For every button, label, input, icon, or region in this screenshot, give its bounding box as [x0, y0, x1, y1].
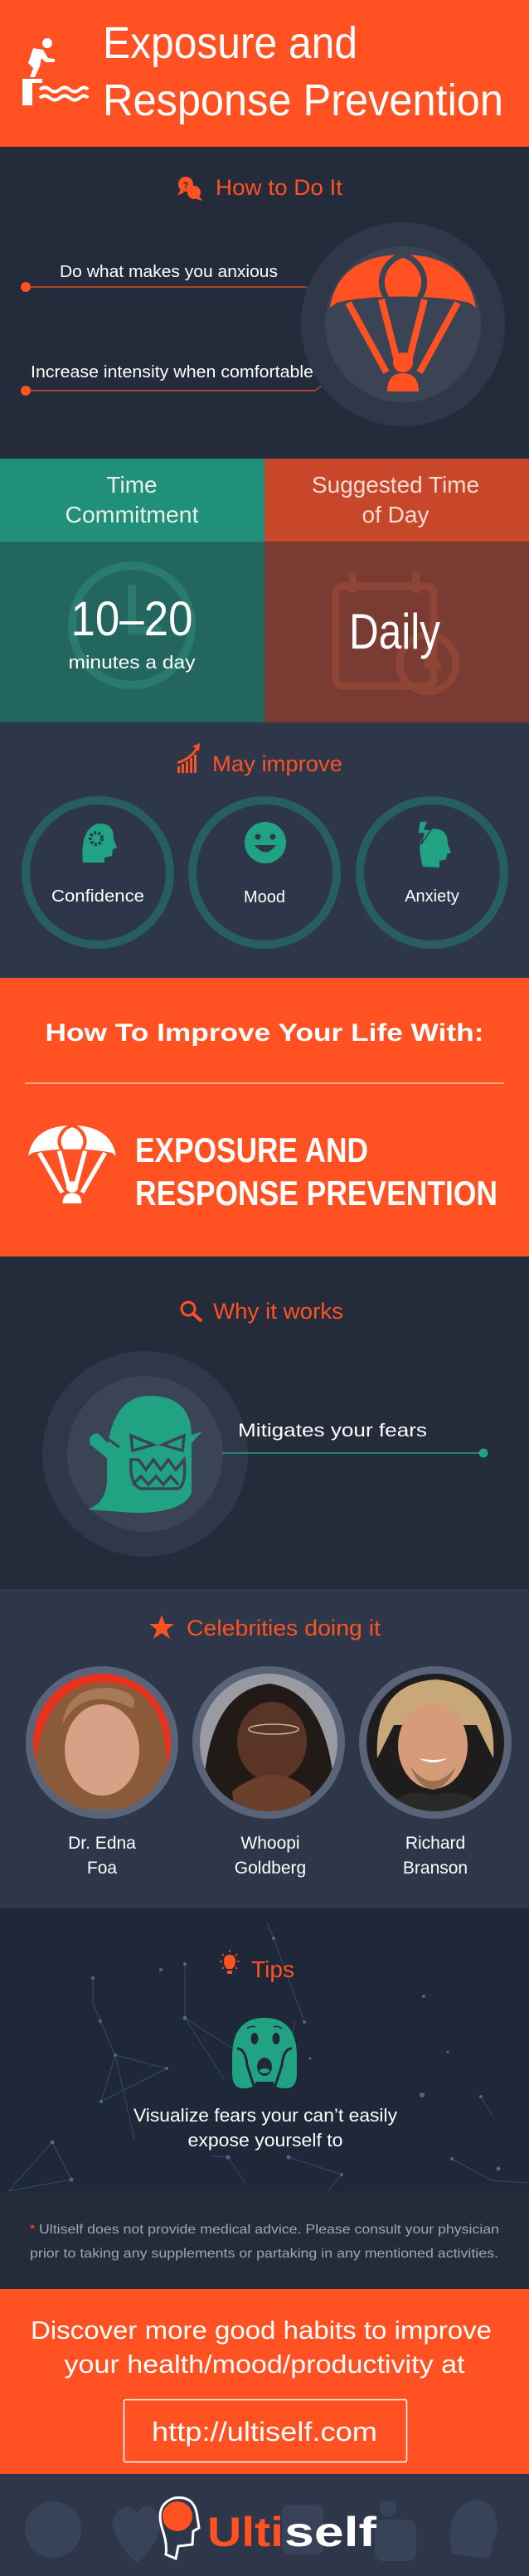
icon: clock watermark [72, 566, 192, 685]
names: Goldberg [235, 1859, 306, 1878]
logo: ultiself [160, 2497, 376, 2559]
names: Richard [405, 1834, 465, 1853]
names: Foa [87, 1859, 117, 1878]
benefit: mood [192, 800, 337, 945]
call to action [0, 2289, 529, 2474]
text: tip: expose yourself to [187, 2130, 343, 2151]
logo: ultiself: Ulti [207, 2509, 284, 2555]
disclaimer [0, 2191, 529, 2289]
icon: ghost in circle [42, 1351, 248, 1557]
photo: whoopi goldberg [191, 1666, 348, 1825]
heading: how to do it: How to Do It [216, 175, 343, 200]
text: 10-20 minutes: 10–20 [71, 592, 192, 646]
heading: suggested time of day: of Day [362, 502, 429, 527]
heading: suggested time of day [312, 472, 479, 527]
benefit: confidence [26, 800, 170, 945]
heading: time commitment [65, 472, 199, 527]
panel: why it works [0, 1256, 529, 1589]
disclaimer: Ultiself does not provide medical advice. Please consult your physician [39, 2223, 499, 2237]
benefit: mood: Mood [244, 888, 285, 906]
names: Dr. Edna [68, 1834, 136, 1853]
heading: tips: Tips [251, 1956, 294, 1982]
photo: richard branson [357, 1666, 514, 1825]
benefit: anxiety: Anxiety [405, 887, 459, 906]
icon: scared face [232, 2018, 297, 2088]
text: tip: Visualize fears your can’t easily [133, 2105, 397, 2126]
panel: suggested time of day [264, 459, 529, 722]
title: Exposure and [103, 18, 357, 68]
text: mitigates your fears: Mitigates your fears [238, 1420, 427, 1441]
text: 10-20 minutes: minutes a day [68, 652, 196, 673]
button: url: http://ultiself.com [152, 2417, 377, 2447]
icon: parachute in circle [301, 222, 505, 426]
heading: tips [220, 1950, 294, 1982]
panel: tips [0, 1908, 529, 2191]
title: exposure and response prevention: EXPOSURE AND [135, 1130, 368, 1169]
heading: why it works: Why it works [213, 1299, 343, 1324]
text block: step 1: Do what makes you anxious [60, 263, 278, 281]
icon: white parachute [28, 1125, 116, 1203]
title: Response Prevention [103, 75, 503, 125]
panel: time commitment [0, 459, 264, 722]
heading: celebrities doing it: Celebrities doing it [187, 1616, 381, 1640]
button: url [124, 2400, 406, 2462]
photo: edna foa [25, 1666, 182, 1825]
heading: how to do it: ? [183, 181, 189, 191]
heading: may improve [177, 743, 342, 776]
text: tip [133, 2105, 397, 2151]
names [68, 1834, 468, 1878]
text block: step 2 [21, 363, 336, 396]
banner: how to improve your life [0, 978, 529, 1256]
disclaimer: prior to taking any supplements or partaking in any mentioned activities. [30, 2247, 498, 2261]
title: exposure and response prevention [135, 1130, 497, 1213]
logo: ultiself: self [284, 2509, 376, 2555]
text block: step 2: Increase intensity when comfortable [31, 363, 313, 382]
disclaimer: * [30, 2223, 35, 2237]
names: Branson [403, 1859, 468, 1878]
heading: time commitment: Commitment [65, 502, 199, 527]
text: mitigates your fears [222, 1420, 488, 1458]
heading: how to improve: How To Improve Your Life With: [45, 1019, 484, 1047]
text: daily: Daily [349, 604, 440, 659]
panel: how to do it [0, 147, 529, 459]
header panel [0, 0, 529, 147]
benefit: anxiety [360, 800, 504, 945]
text: 10-20 minutes [68, 592, 196, 673]
heading: time commitment: Time [106, 472, 158, 498]
panel: may improve [0, 722, 529, 978]
footer [0, 2474, 529, 2576]
icon: diver [22, 38, 88, 105]
panel: celebrities [0, 1589, 529, 1908]
icon: calendar watermark [336, 572, 456, 692]
names: Whoopi [240, 1834, 300, 1853]
benefit: confidence: Confidence [51, 887, 144, 906]
heading: suggested time of day: Suggested Time [312, 472, 479, 498]
call to action: Discover more good habits to improve [31, 2316, 492, 2345]
heading: may improve: May improve [212, 751, 342, 776]
title [103, 18, 503, 125]
call to action: your health/mood/productivity at [65, 2350, 465, 2379]
text block: step 1 [21, 263, 328, 297]
